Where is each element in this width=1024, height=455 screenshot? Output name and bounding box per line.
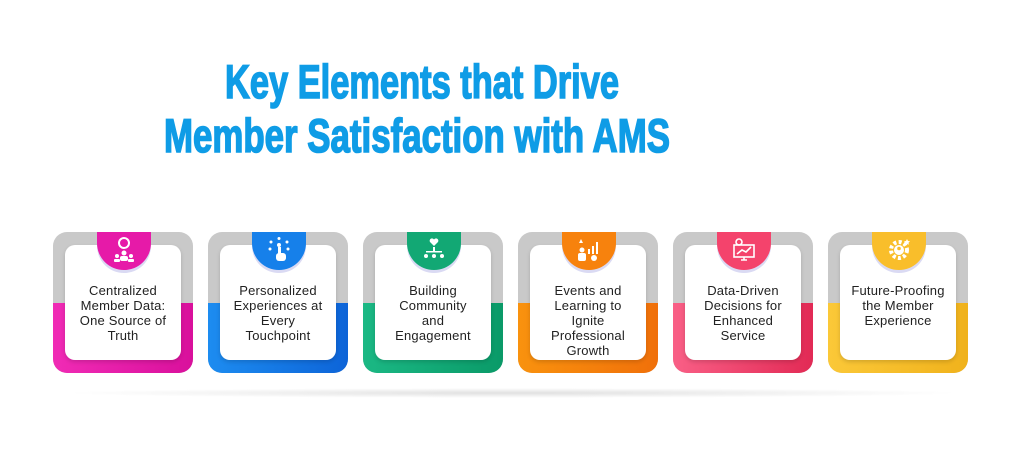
text: Ignite <box>571 313 604 328</box>
text: Data-Driven <box>707 283 779 298</box>
card: centralized member data <box>53 232 193 373</box>
card: data-driven decisions <box>673 232 813 373</box>
title: Key Elements that Drive <box>225 55 619 108</box>
icon: monitor chart <box>717 232 771 270</box>
icon: gear person <box>872 232 926 270</box>
icon: community <box>407 232 461 270</box>
text: Touchpoint <box>246 328 310 343</box>
text <box>704 283 782 343</box>
text: Centralized <box>89 283 157 298</box>
text: the Member <box>862 298 934 313</box>
text <box>551 283 625 358</box>
icon: growth <box>562 232 616 270</box>
text: Learning to <box>554 298 622 313</box>
text <box>395 283 471 343</box>
text <box>80 283 166 343</box>
text: Member Data: <box>81 298 165 313</box>
text: Experiences at <box>234 298 322 313</box>
text: and <box>422 313 444 328</box>
title <box>164 55 670 162</box>
text: Professional <box>551 328 625 343</box>
icon: people award <box>97 232 151 270</box>
card: future-proofing <box>828 232 968 373</box>
text: Future-Proofing <box>851 283 945 298</box>
text: Events and <box>554 283 622 298</box>
card: personalized experiences <box>208 232 348 373</box>
text <box>234 283 322 343</box>
text: Decisions for <box>704 298 782 313</box>
text: Service <box>721 328 765 343</box>
text <box>851 283 945 328</box>
card: building community <box>363 232 503 373</box>
shadow base <box>60 388 965 398</box>
text: Engagement <box>395 328 471 343</box>
text: Personalized <box>239 283 317 298</box>
text: Enhanced <box>713 313 773 328</box>
icon: touch <box>252 232 306 270</box>
title: Member Satisfaction with AMS <box>164 109 670 162</box>
text: Truth <box>108 328 138 343</box>
text: Every <box>261 313 295 328</box>
text: Building <box>409 283 457 298</box>
text: One Source of <box>80 313 166 328</box>
text: Experience <box>864 313 932 328</box>
text: Community <box>399 298 467 313</box>
card: events and learning <box>518 232 658 373</box>
text: Growth <box>566 343 610 358</box>
